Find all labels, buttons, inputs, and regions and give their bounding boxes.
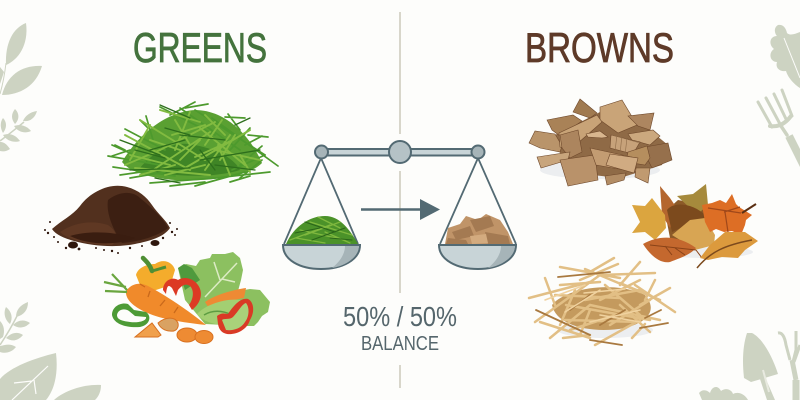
- autumn leaves: [632, 184, 758, 268]
- grass clippings pile: [108, 102, 278, 186]
- lettuce: [178, 252, 270, 326]
- decorative foliage: bottom left: [0, 302, 101, 400]
- red pepper ring back: [163, 278, 201, 310]
- lettuce small: [197, 300, 247, 325]
- straw pile: [529, 258, 675, 345]
- title: browns: BROWNS: [525, 24, 674, 71]
- carrot: [126, 284, 206, 325]
- right pan: [439, 245, 516, 269]
- decorative foliage: bottom right: [699, 387, 748, 400]
- decorative icon: trowel: [743, 333, 778, 400]
- carrot coins: [135, 318, 213, 344]
- balance label: BALANCE: [361, 333, 439, 355]
- cardboard scraps: [529, 99, 672, 186]
- brown fill in right pan: [445, 214, 513, 244]
- left pan: [283, 245, 360, 269]
- yellow pepper: [136, 261, 175, 292]
- soil pile: [44, 186, 178, 254]
- orange slice: [205, 288, 246, 310]
- decorative icon: hand fork: [778, 331, 800, 400]
- balance scale: [283, 141, 516, 269]
- red pepper ring front: [217, 299, 253, 334]
- scale strings: [284, 158, 516, 244]
- arrow: [361, 199, 440, 220]
- decorative icon: garden fork: [758, 90, 800, 166]
- title: greens: GREENS: [133, 24, 267, 71]
- decorative foliage: top left: [0, 23, 42, 151]
- beam: [325, 149, 475, 156]
- green fill in left pan: [286, 216, 358, 244]
- balance percentage: 50% / 50%: [343, 301, 457, 332]
- vegetables: [104, 252, 270, 344]
- decorative foliage: top right oak leaf: [770, 25, 800, 88]
- green pepper ring: [112, 304, 149, 327]
- soil crumbs: [44, 221, 178, 254]
